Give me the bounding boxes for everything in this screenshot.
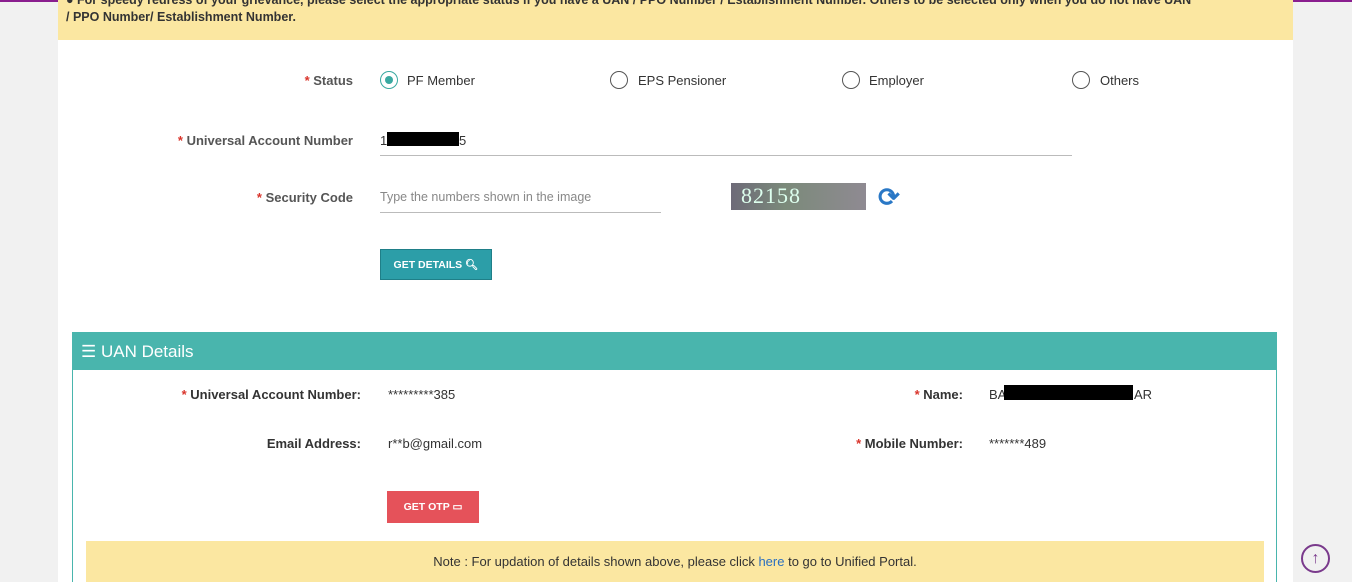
icon: refresh: ⟳ [878, 182, 900, 212]
get otp button: GET OTP ▭ [404, 501, 462, 513]
get details button: GET DETAILS 🔍︎ [394, 259, 478, 271]
panel: UAN details: Email Address: [267, 436, 361, 451]
radio options: EPS Pensioner [638, 73, 726, 88]
panel: UAN details: r**b@gmail.com [388, 436, 482, 451]
UAN input [380, 130, 1072, 156]
security input: Type the numbers shown in the image [380, 190, 591, 204]
panel: UAN details: *********385 [388, 387, 455, 402]
icon: scroll up: ↑ [1312, 550, 1320, 567]
captcha image [731, 183, 866, 210]
UAN input: 1 [380, 133, 387, 148]
radio options: PF Member [407, 73, 475, 88]
panel: UAN details: BA [989, 387, 1006, 402]
security input [380, 186, 661, 213]
top purple line [0, 0, 1352, 2]
panel: UAN details: AR [1134, 387, 1152, 402]
get otp button [387, 491, 479, 523]
panel header: ☰ UAN Details [81, 342, 194, 361]
get details button [380, 249, 492, 280]
yellow info banner: / PPO Number/ Establishment Number. [66, 10, 296, 24]
details rows: * Universal Account Number: [182, 387, 361, 402]
status label: * Status [305, 73, 353, 88]
radio options: Employer [869, 73, 924, 88]
icon: scroll up [1301, 544, 1330, 573]
security code label: * Security Code [257, 190, 353, 205]
yellow info banner [58, 0, 1293, 40]
panel: UAN details [72, 332, 1277, 582]
panel: UAN details: * Mobile Number: [856, 436, 963, 451]
radio options [380, 71, 1139, 89]
panel: UAN details: * Name: [915, 387, 963, 402]
UAN input: 5 [459, 133, 466, 148]
note: Note : For updation of details shown above, please click here to go to Unified Portal. [433, 554, 917, 569]
note [86, 541, 1264, 582]
radio options: Others [1100, 73, 1139, 88]
panel: UAN details: *******489 [989, 436, 1046, 451]
panel header [73, 333, 1277, 370]
captcha image: 82158 [741, 183, 801, 208]
UAN label: * Universal Account Number [178, 133, 353, 148]
